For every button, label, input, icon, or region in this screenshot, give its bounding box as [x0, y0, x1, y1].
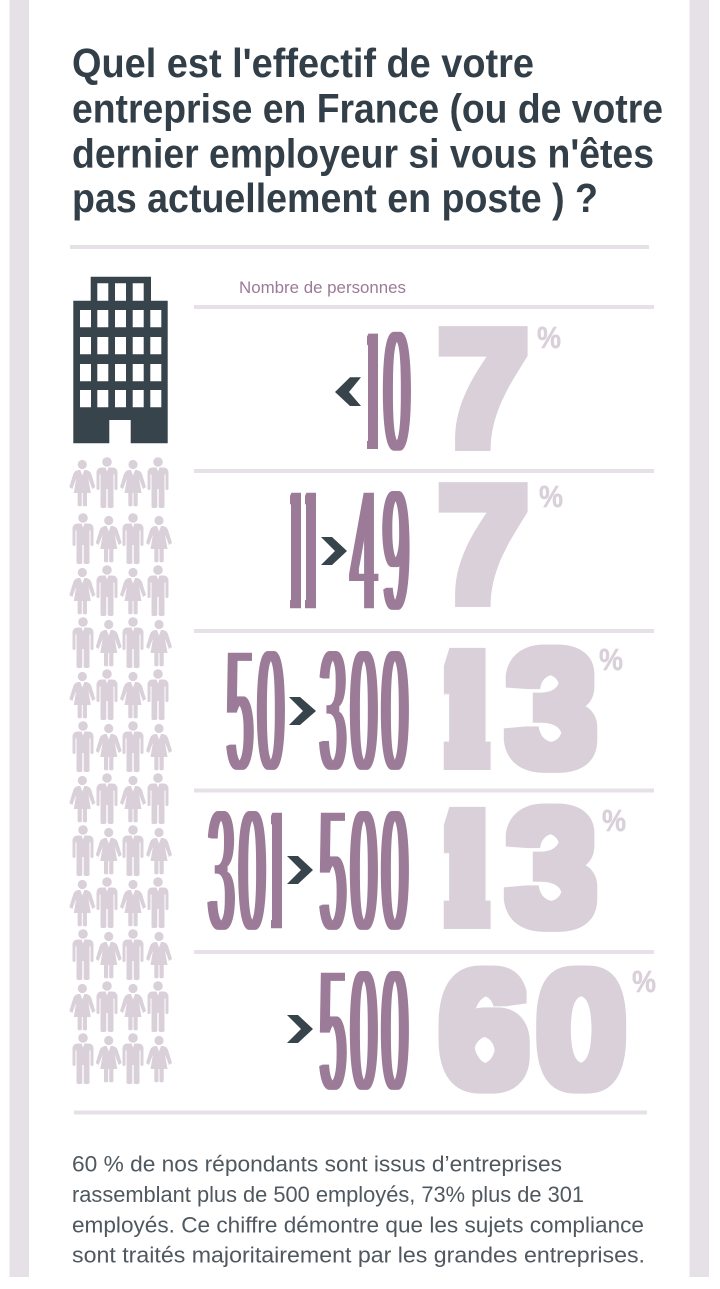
value: 13: 3 [506, 617, 597, 800]
value: 13: 1 [458, 621, 475, 799]
summary text: 60 % de nos répondants sont issus d’entreprises [72, 1152, 562, 1176]
range label: 11 [290, 492, 316, 608]
column heading: number of people: Nombre de personnes [239, 278, 406, 297]
range label: 301 [207, 811, 282, 930]
left side bar [10, 0, 29, 1277]
summary text: sont traités majoritairement par les grandes entreprises. [72, 1242, 645, 1268]
people row 7 [69, 773, 168, 824]
value: 13: 1 [458, 780, 475, 958]
arrow: to [289, 697, 316, 725]
title: dernier employeur si vous n'êtes [72, 130, 654, 176]
people row 10 [72, 929, 172, 980]
people row 2 [72, 513, 172, 564]
percent sign: % [602, 803, 626, 838]
row: more than 500 [287, 933, 656, 1129]
percent sign: % [599, 642, 623, 677]
arrow: to [287, 856, 313, 884]
people row 5 [69, 669, 168, 720]
range label: 500: 500 [320, 773, 413, 969]
range label: 10 [367, 332, 411, 451]
range label: 301: 1 [262, 774, 291, 969]
arrow: more than [287, 1015, 313, 1043]
title: pas actuellement en poste ) ? [72, 175, 598, 221]
people row 9 [69, 877, 168, 928]
value: 7: 7 [438, 297, 529, 480]
range label: 10: 1 [358, 294, 387, 489]
people row 4 [72, 617, 172, 668]
title: entreprise en France (ou de votre [72, 86, 663, 132]
row: 11 to 49 [290, 482, 562, 610]
icon: crowd of employees [69, 457, 172, 1084]
title: Quel est l'effectif de votre [72, 40, 534, 86]
summary text: rassemblant plus de 500 employés, 73% plus de 301 [72, 1182, 584, 1207]
row: 50 to 300 [227, 613, 623, 809]
summary text [72, 1152, 645, 1268]
range label: 300: 300 [320, 613, 413, 809]
percent sign: % [632, 964, 656, 999]
icon: office building [73, 277, 168, 443]
arrow: to [321, 537, 347, 565]
value: 60: 60 [438, 938, 633, 1121]
title [72, 40, 663, 221]
range label: 10: 0 [384, 294, 410, 490]
people row 1 [69, 457, 168, 508]
value: 7: 7 [438, 453, 529, 636]
row: 301 to 500 [207, 804, 626, 932]
people row 11 [69, 981, 168, 1032]
percent sign: % [537, 320, 561, 355]
right side bar [690, 0, 709, 1277]
row: fewer than 10 [335, 326, 560, 451]
people row 6 [72, 721, 172, 772]
percent sign: % [539, 479, 563, 514]
value: 13: 3 [506, 776, 597, 959]
people row 12 [72, 1033, 172, 1084]
value: 13 [458, 776, 597, 959]
range label: 301: 30 [208, 773, 270, 969]
people row 3 [69, 565, 168, 616]
range label: 49: 49 [351, 453, 415, 649]
range label: 11: 1 [296, 454, 325, 649]
range label: 50: 50 [227, 613, 289, 809]
range label: 500: 500 [320, 933, 413, 1129]
range label: 11: 1 [281, 454, 310, 649]
people row 8 [72, 825, 172, 876]
arrow: less than [335, 377, 361, 406]
summary text: employés. Ce chiffre démontre que les sujets compliance [72, 1212, 644, 1238]
value: 13 [458, 617, 597, 800]
